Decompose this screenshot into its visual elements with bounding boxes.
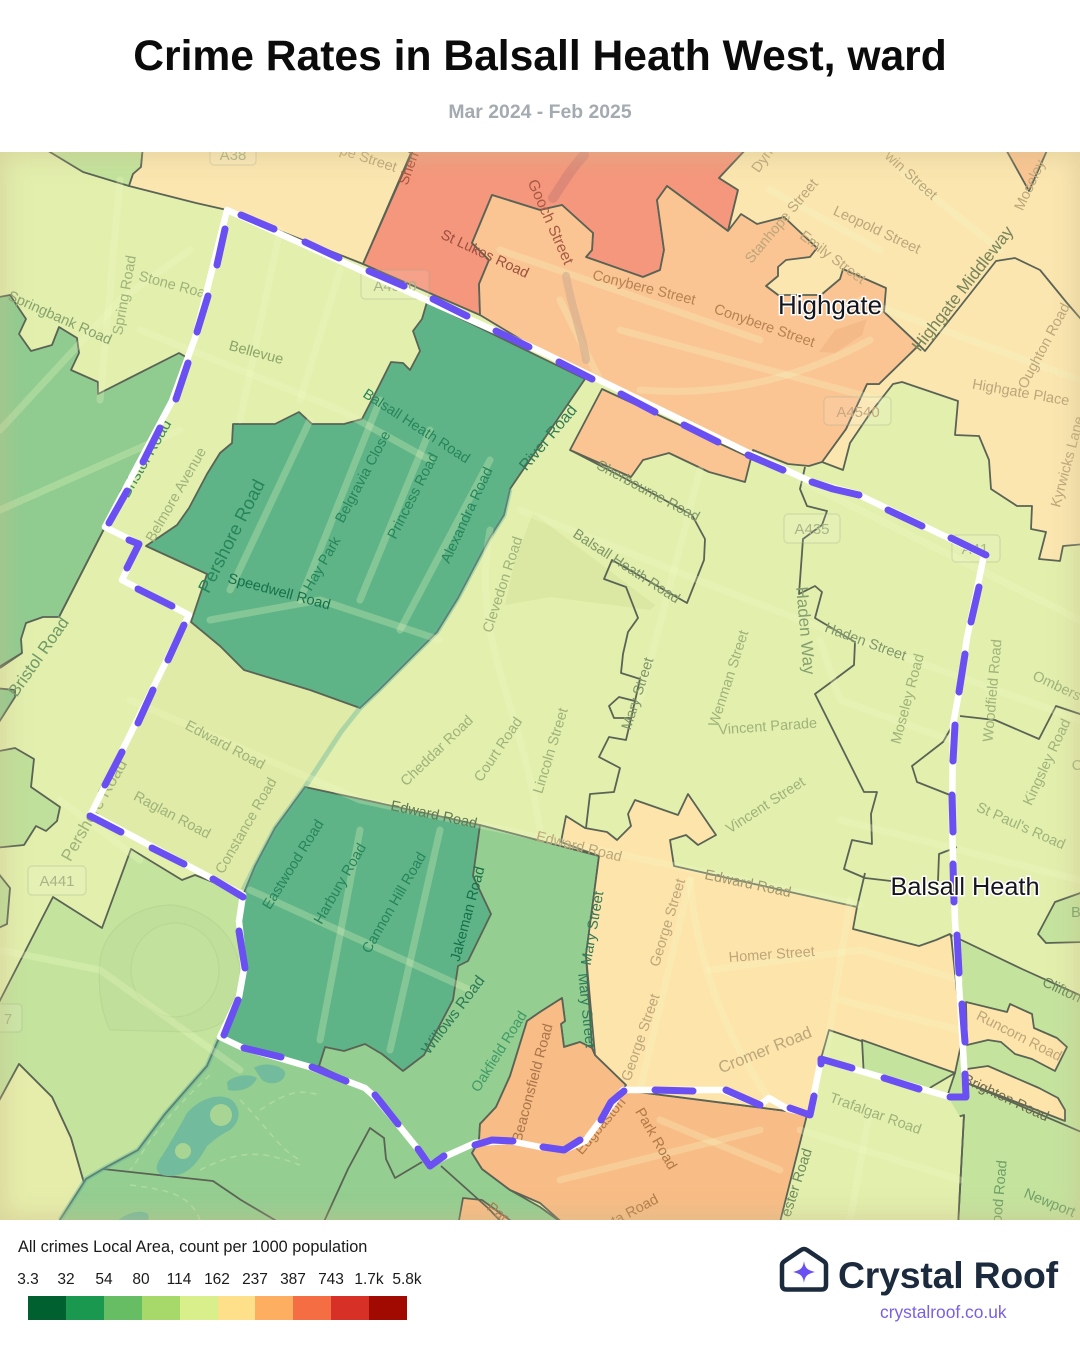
road labels on green areas: Hay Park xyxy=(301,534,345,594)
road labels on green areas: Oakfield Road xyxy=(468,1009,531,1095)
road labels on cream and peach areas: Conybere Street xyxy=(591,268,697,309)
legend value labels: 5.8k xyxy=(392,1271,422,1288)
road labels on green areas: River Road xyxy=(516,402,581,474)
road labels on cream and peach areas: Gooch Street xyxy=(524,177,577,268)
road labels on cream and peach areas xyxy=(338,142,1080,1229)
road labels on green areas: Cannon Hill Road xyxy=(359,850,430,956)
panel: choropleth map xyxy=(0,152,1080,1220)
road labels on green areas: Speedwell Road xyxy=(226,571,332,614)
road labels on cream and peach areas: Runcorn Road xyxy=(974,1008,1064,1065)
legend value labels: 54 xyxy=(95,1271,113,1288)
road labels on light areas: Haden Street xyxy=(822,620,908,664)
road labels on cream and peach areas: St Lukes Road xyxy=(438,227,531,282)
road labels on cream and peach areas: Stanhope Street xyxy=(742,176,822,267)
road labels on green areas: Jakeman Road xyxy=(448,865,488,963)
boundary lines xyxy=(0,258,1080,1226)
boundary: white casing xyxy=(91,210,984,1165)
road labels on light areas: Springbank Road xyxy=(5,288,114,348)
road labels on light areas: Edward Road xyxy=(182,718,267,773)
choropleth areas xyxy=(0,146,1080,1226)
road labels on light areas: Raglan Road xyxy=(131,789,213,842)
legend value labels: 1.7k xyxy=(354,1271,384,1288)
ward boundary xyxy=(90,210,986,1166)
road labels on cream and peach areas: Highgate Place xyxy=(971,377,1071,409)
road labels on green areas: Bristol Road xyxy=(117,417,175,501)
legend value labels: 32 xyxy=(57,1271,75,1288)
legend value labels: 162 xyxy=(204,1271,230,1288)
road labels on cream and peach areas: Oughton Road xyxy=(1015,301,1074,392)
road labels on light areas: Cheddar Road xyxy=(398,713,477,790)
road network xyxy=(0,170,1080,1220)
road labels on green areas: Belgravia Close xyxy=(333,429,394,526)
road labels on light areas: Bellevue xyxy=(227,338,285,368)
road shield labels xyxy=(4,147,988,1028)
map edge vignette xyxy=(0,152,1080,1220)
road labels on light areas: Moseley Road xyxy=(888,652,928,746)
road labels on light areas: Belmore Avenue xyxy=(143,445,210,545)
road labels on light areas: Sherbourne Road xyxy=(594,458,702,525)
icon: Crystal Roof house logo xyxy=(780,1246,828,1292)
road labels on cream and peach areas: George Street xyxy=(647,877,689,969)
road shield labels: A4540 xyxy=(373,278,417,295)
road labels on green areas xyxy=(117,386,607,1095)
road labels on light areas: Clevedon Road xyxy=(480,535,526,635)
road labels on cream and peach areas: Highgate Middleway xyxy=(908,222,1018,355)
road labels on cream and peach areas: Edgbaston xyxy=(573,1095,629,1158)
river bank tint xyxy=(60,489,510,1220)
road shield labels: A4540 xyxy=(836,404,880,421)
road labels on light areas: Court Road xyxy=(471,715,526,785)
road labels on green areas: Willows Road xyxy=(418,973,488,1058)
stadium xyxy=(99,905,240,1032)
road labels on cream and peach areas: Conybere Street xyxy=(712,301,817,351)
road labels on cream and peach areas: Brighton Road xyxy=(960,1072,1051,1125)
road labels on light areas: Stone Roa xyxy=(137,269,208,302)
road labels on cream and peach areas: Edward Road xyxy=(534,829,624,866)
road labels on light areas: Woodfield Road xyxy=(981,639,1005,743)
lakes in the park xyxy=(113,1065,285,1226)
legend value labels: 3.3 xyxy=(17,1271,39,1288)
road labels on light areas: Lincoln Street xyxy=(531,706,572,796)
islands in the lake xyxy=(175,1104,232,1159)
subtitle: date range: Mar 2024 - Feb 2025 xyxy=(448,101,632,123)
road labels on light areas: Bristol Road xyxy=(4,613,73,700)
road labels on light areas: Balsall Heath Road xyxy=(570,526,683,607)
road labels on light areas: Constance Road xyxy=(213,775,280,877)
road labels on light areas: Vincent Parade xyxy=(718,716,818,738)
road labels on cream and peach areas: Cromer Road xyxy=(716,1023,814,1077)
road shield badges xyxy=(0,140,1000,1032)
road labels on light areas: ester Road xyxy=(779,1147,816,1219)
road labels on cream and peach areas: Park Road xyxy=(631,1105,680,1173)
place label: Highgate: Highgate xyxy=(778,290,882,320)
road labels on cream and peach areas: Moseley xyxy=(1012,157,1049,213)
road labels on green areas: Balsall Heath Road xyxy=(360,386,473,467)
road labels on light areas: Trafalgar Road xyxy=(827,1090,923,1138)
road labels on cream and peach areas: George Street xyxy=(619,992,664,1083)
road labels on cream and peach areas: Beaconsfield Road xyxy=(510,1022,557,1144)
place label: Balsall Heath: Balsall Heath xyxy=(890,873,1040,901)
road labels on light areas: Mary Street xyxy=(619,656,657,732)
road shield labels: A41 xyxy=(962,541,988,558)
legend value labels xyxy=(17,1271,422,1288)
legend value labels: 387 xyxy=(280,1271,306,1288)
road labels on light areas: Edward Road xyxy=(389,798,478,832)
road labels on cream and peach areas: Emily Street xyxy=(796,228,868,288)
legend title: All crimes Local Area, count per 1000 population xyxy=(18,1238,367,1256)
brand name: Crystal Roof xyxy=(838,1254,1058,1296)
rail and road tints near Gooch Street xyxy=(553,155,586,360)
road labels on light areas: Haden Way xyxy=(792,586,819,676)
boundary: purple dashes xyxy=(90,215,986,1166)
road shield labels: A441 xyxy=(39,873,75,890)
legend value labels: 743 xyxy=(318,1271,344,1288)
road shield labels: A435 xyxy=(794,521,830,538)
road labels on light areas: Wenman Street xyxy=(706,629,752,729)
road labels on green areas: Mary Street xyxy=(579,890,607,967)
title: Crime Rates in Balsall Heath West, ward xyxy=(133,32,947,80)
road labels on light areas: St Paul's Road xyxy=(974,800,1067,853)
road labels on cream and peach areas: Homer Street xyxy=(728,944,815,966)
road labels on light areas xyxy=(4,254,1080,1224)
road labels on green areas: Harbury Road xyxy=(311,841,370,927)
road labels on green areas: Mary Street xyxy=(574,972,598,1049)
legend value labels: 114 xyxy=(167,1271,191,1288)
road labels on green areas: Princess Road xyxy=(385,451,442,542)
road labels on light areas: Edward Road xyxy=(703,867,792,901)
road labels on cream and peach areas: Leopold Street xyxy=(831,203,923,258)
brand url: crystalroof.co.uk xyxy=(880,1302,1007,1322)
highgate park patch xyxy=(819,319,867,353)
road labels on green areas: Eastwood Road xyxy=(260,817,328,913)
legend value labels: 237 xyxy=(242,1271,268,1288)
road labels on green areas: Pershore Road xyxy=(194,476,269,596)
road labels on light areas: Spring Road xyxy=(110,254,140,336)
legend value labels: 80 xyxy=(132,1271,150,1288)
park footpaths xyxy=(130,1075,320,1220)
road labels on light areas: Pershore Road xyxy=(57,756,131,865)
road shield labels: 7 xyxy=(4,1011,12,1028)
legend colour scale xyxy=(28,1296,407,1320)
road labels on light areas: Newport xyxy=(1021,1186,1078,1220)
road labels on light areas: Vincent Street xyxy=(723,774,808,837)
road labels on light areas: Kingsley Road xyxy=(1020,717,1074,808)
road labels on green areas: Alexandra Road xyxy=(438,465,497,566)
